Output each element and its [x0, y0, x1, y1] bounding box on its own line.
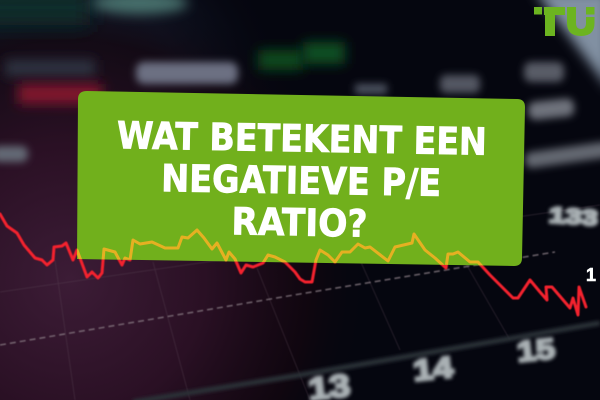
title: WAT BETEKENT EEN [117, 113, 487, 164]
axis number 15: 15 [516, 333, 557, 369]
blurred axis numbers [306, 202, 599, 400]
axis number 133: 133 [548, 202, 599, 231]
yellow price line seen through banner [77, 228, 484, 266]
red price line [0, 214, 586, 315]
chart grid lines [0, 205, 600, 400]
dashed price line [0, 252, 555, 345]
icon: TU logo [534, 7, 594, 36]
axis number 14: 14 [412, 351, 455, 388]
axis bar [133, 323, 600, 400]
title: NEGATIEVE P/E [161, 156, 442, 205]
title: RATIO? [231, 199, 368, 246]
axis number 1: 1 [586, 265, 596, 285]
title [115, 113, 487, 248]
panel: green title banner [77, 91, 525, 266]
